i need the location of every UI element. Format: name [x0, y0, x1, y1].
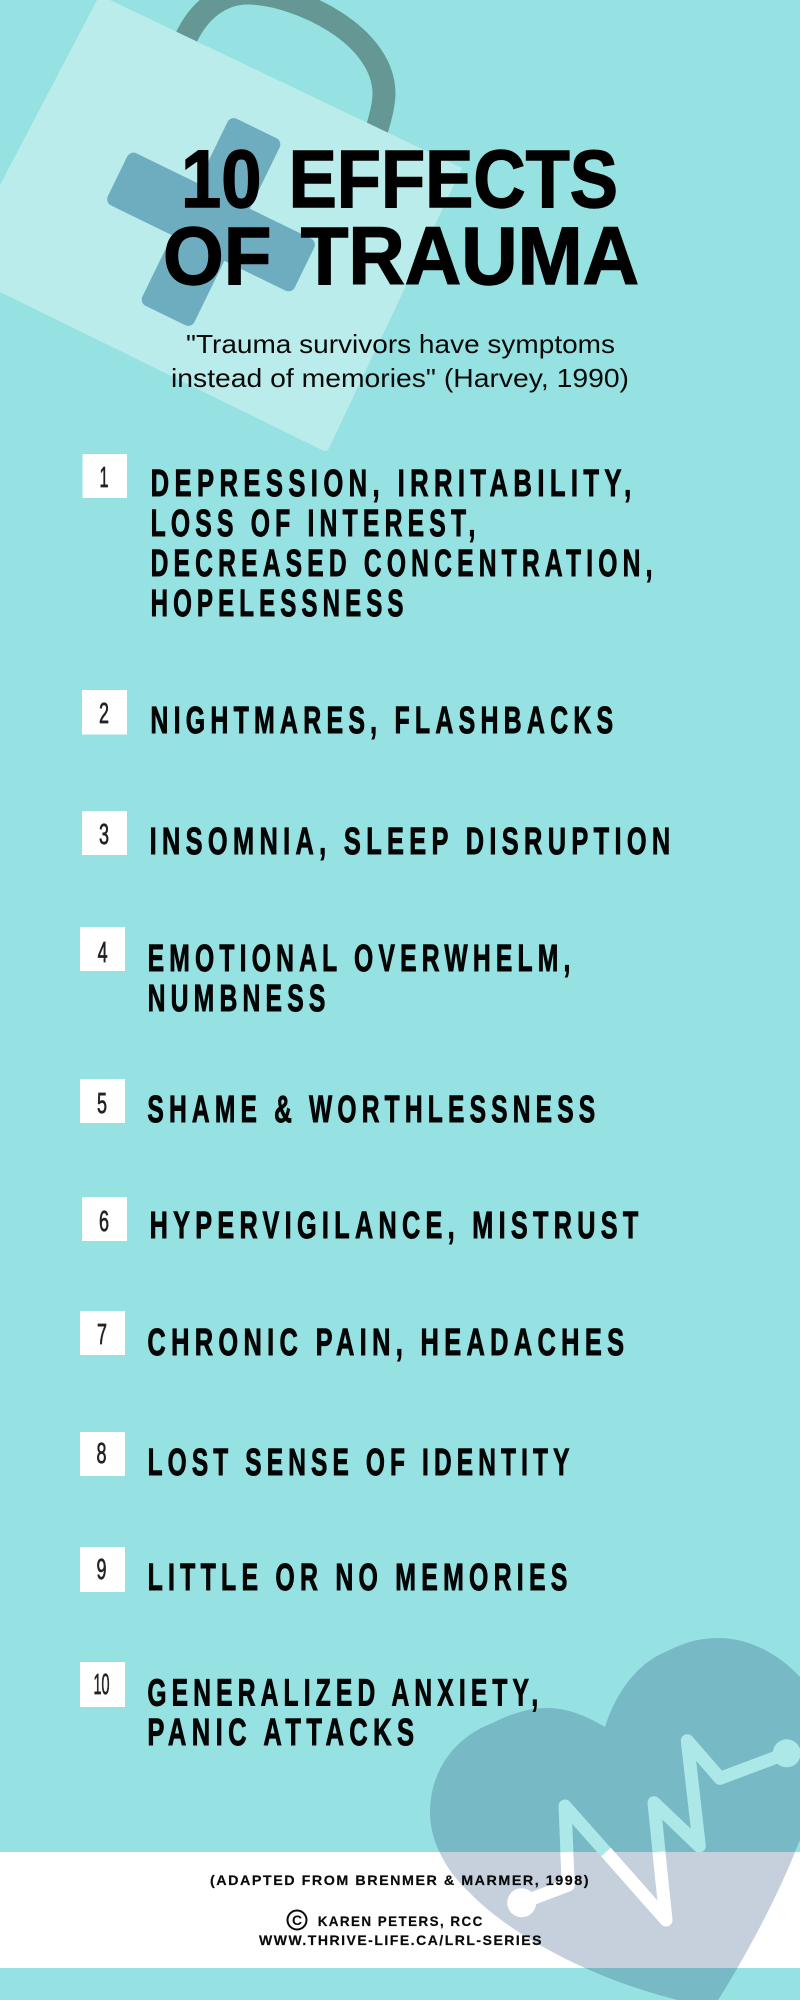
- icon: copyright: C: [292, 1912, 302, 1928]
- number box 6: [82, 1197, 127, 1241]
- title: 10 EFFECTS: [181, 134, 618, 225]
- pulse line on band: [507, 1852, 666, 1920]
- footer credits: [210, 1872, 590, 1948]
- number box 5: 5: [97, 1088, 107, 1120]
- number box 5: [80, 1079, 125, 1123]
- number box 6: 6: [99, 1206, 109, 1238]
- number box 3: [82, 811, 127, 855]
- footer band: [0, 1852, 800, 1968]
- number box 7: 7: [97, 1319, 107, 1351]
- number box 7: [80, 1311, 125, 1355]
- subtitle quote: instead of memories" (Harvey, 1990): [171, 363, 629, 393]
- item 3: [82, 811, 676, 863]
- number box 10: [80, 1662, 125, 1707]
- item 1: [82, 454, 658, 625]
- item 10 text: GENERALIZED ANXIETY,: [147, 1673, 543, 1715]
- item 2: [82, 690, 618, 742]
- number box 9: [80, 1547, 125, 1592]
- bag body: [0, 0, 462, 451]
- bag cross: [105, 116, 317, 328]
- number box 8: 8: [96, 1438, 106, 1470]
- number box 3: 3: [99, 819, 109, 851]
- item 9 text: LITTLE OR NO MEMORIES: [148, 1557, 573, 1599]
- number box 2: 2: [99, 698, 109, 730]
- subtitle quote: [171, 329, 629, 393]
- number box 4: 4: [98, 937, 108, 969]
- heart shape: [430, 1638, 800, 2000]
- pulse line: [522, 1739, 800, 1920]
- subtitle quote: "Trauma survivors have symptoms: [186, 329, 615, 359]
- icon: medical bag: [0, 0, 462, 451]
- item 1 text: LOSS OF INTEREST,: [151, 503, 481, 545]
- item 6: [82, 1197, 644, 1247]
- item 4 text: [148, 938, 576, 1020]
- item 4 text: EMOTIONAL OVERWHELM,: [148, 938, 576, 980]
- item 1 text: [151, 463, 658, 625]
- number box 1: [82, 454, 127, 498]
- icon: copyright: [288, 1910, 306, 1930]
- source line: (ADAPTED FROM BRENMER & MARMER, 1998): [210, 1872, 590, 1888]
- author line: KAREN PETERS, RCC: [318, 1913, 484, 1929]
- title: OF TRAUMA: [163, 211, 639, 302]
- number box 4: [80, 927, 125, 971]
- title: [163, 134, 639, 302]
- item 8: [80, 1432, 575, 1484]
- item 10 text: [147, 1673, 543, 1754]
- item 4: [80, 927, 576, 1020]
- number box 9: 9: [96, 1554, 106, 1586]
- item 1 text: HOPELESSNESS: [151, 583, 409, 625]
- icon: heart with pulse line: [430, 1638, 800, 2000]
- number box 10: 10: [94, 1669, 110, 1701]
- number box 1: 1: [100, 462, 108, 494]
- item 5: [80, 1079, 600, 1131]
- item 9: [80, 1547, 573, 1599]
- website line: WWW.THRIVE-LIFE.CA/LRL-SERIES: [259, 1932, 543, 1948]
- number box 2: [82, 690, 127, 734]
- bag handle: [183, 0, 384, 135]
- item 7: [80, 1311, 629, 1364]
- item 10: [80, 1662, 543, 1754]
- item 10 text: PANIC ATTACKS: [147, 1712, 419, 1754]
- item 4 text: NUMBNESS: [148, 978, 331, 1020]
- item 8 text: LOST SENSE OF IDENTITY: [148, 1442, 575, 1484]
- number box 8: [80, 1432, 125, 1476]
